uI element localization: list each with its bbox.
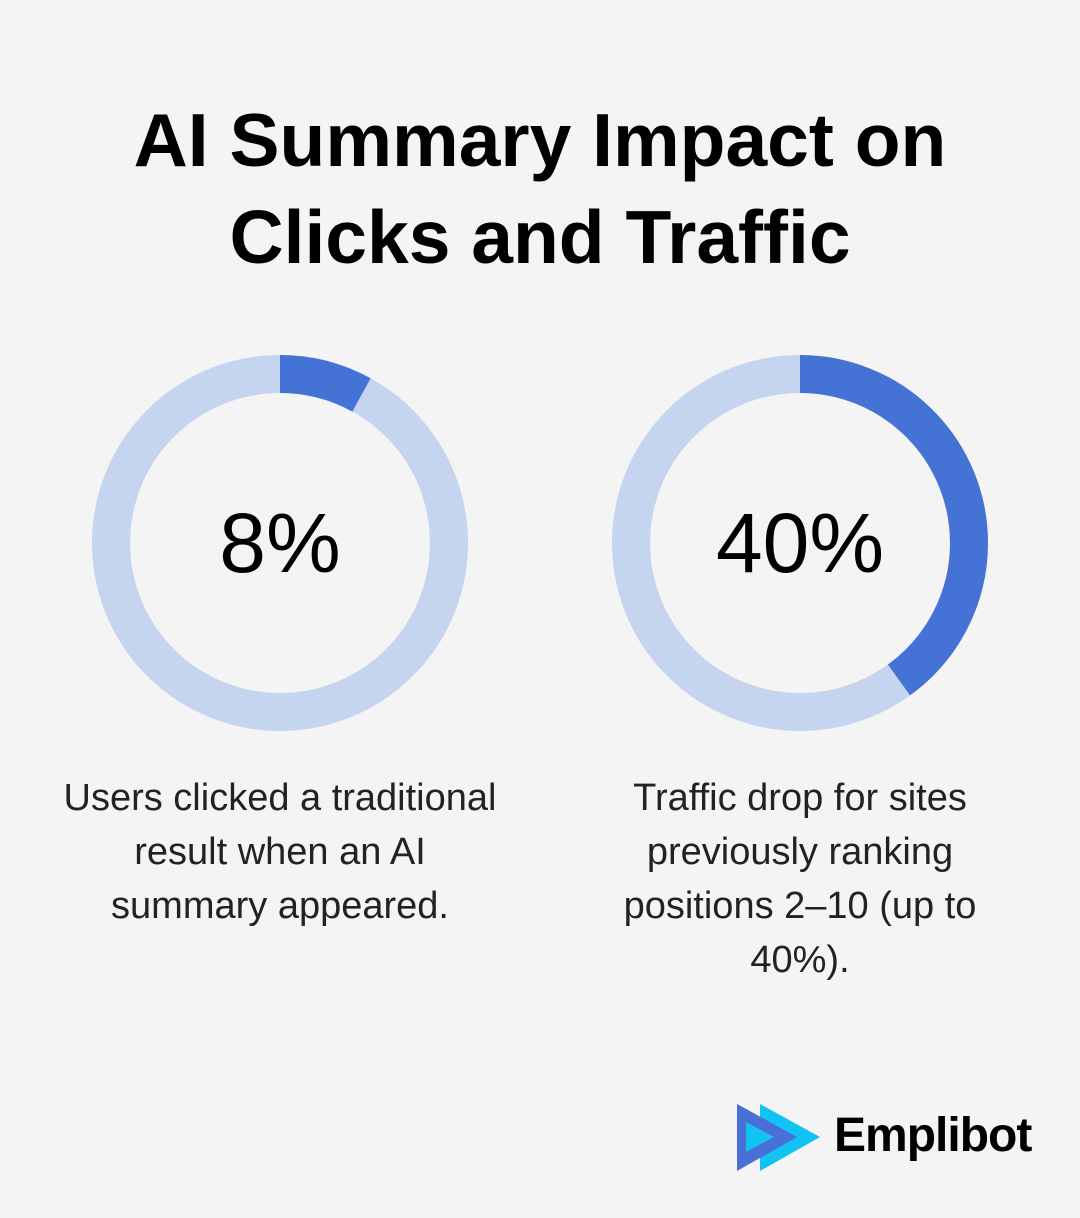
text: right description: 40%). xyxy=(750,939,850,981)
donut chart: 40%: 40% xyxy=(716,496,884,590)
icon: play triangles xyxy=(737,1104,820,1171)
title: Clicks and Traffic xyxy=(229,195,851,279)
title: AI Summary Impact on xyxy=(134,98,946,182)
text: right description: positions 2–10 (up to xyxy=(624,885,976,927)
donut chart: 40% xyxy=(612,355,988,731)
text: right description: Traffic drop for sites xyxy=(633,777,967,819)
text: left description: summary appeared. xyxy=(111,885,449,927)
text: left description: Users clicked a traditional xyxy=(64,777,496,819)
donut chart: 8% xyxy=(92,355,468,731)
donut chart: 8%: 8% xyxy=(219,496,341,590)
text: left description xyxy=(64,777,496,927)
text: left description: result when an AI xyxy=(134,831,426,873)
logo xyxy=(737,1104,1032,1171)
text: right description xyxy=(624,777,976,981)
title xyxy=(134,98,946,279)
brand name: Emplibot xyxy=(834,1109,1031,1162)
text: right description: previously ranking xyxy=(647,831,953,873)
